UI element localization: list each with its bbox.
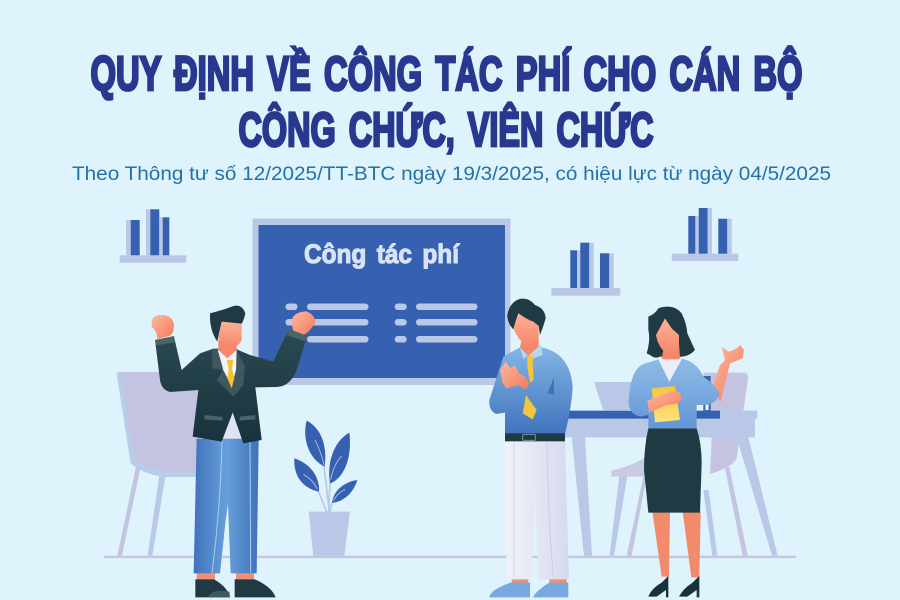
- desk legs: [572, 437, 592, 556]
- skirt: [644, 428, 702, 513]
- legs: [652, 512, 701, 577]
- title: CÔNG CHỨC, VIÊN CHỨC: [238, 102, 654, 157]
- heels: [648, 576, 699, 597]
- shirt: [489, 347, 573, 434]
- chair legs: [610, 467, 748, 556]
- ankles: [512, 579, 567, 583]
- plant in pot: [294, 421, 357, 556]
- fists: [152, 315, 174, 339]
- undershirt: [222, 417, 242, 439]
- face: [513, 314, 539, 347]
- belt: [505, 433, 565, 441]
- shoes: [195, 579, 276, 597]
- subtitle: Theo Thông tư số 12/2025/TT-BTC ngày 19/3/2025, có hiệu lực từ ngày 04/5/2025: [72, 164, 831, 185]
- hair: [210, 306, 245, 342]
- man in dark jacket: [152, 306, 315, 597]
- collar: [520, 344, 543, 359]
- left shelf with books: [120, 209, 186, 263]
- undershirt: [659, 359, 682, 382]
- left chair: [117, 372, 200, 556]
- desk with laptop and right chair: [564, 373, 778, 556]
- shoes: [489, 583, 568, 597]
- board list lines: [286, 304, 478, 342]
- neck: [662, 343, 680, 363]
- jacket: [155, 330, 307, 443]
- shirt: [217, 350, 237, 387]
- board heading: Công tác phí: [304, 239, 460, 269]
- tie: [523, 356, 537, 419]
- raised arm: [712, 345, 744, 402]
- sleeve fold: [547, 377, 554, 395]
- laptop: [594, 382, 637, 411]
- trousers: [505, 441, 569, 579]
- forearm: [647, 391, 682, 413]
- blouse: [629, 359, 720, 428]
- floor line: [104, 556, 796, 558]
- neck: [218, 340, 237, 358]
- neck: [520, 333, 539, 356]
- lapels: [212, 348, 233, 397]
- board: [252, 218, 510, 385]
- legs: [197, 573, 254, 581]
- man clapping: [489, 299, 573, 597]
- right shelf with books: [672, 208, 738, 261]
- chair seat and back: [611, 457, 647, 477]
- tie: [227, 360, 234, 388]
- face: [218, 322, 242, 348]
- clapping hands: [500, 362, 529, 389]
- cuffs: [155, 329, 307, 345]
- centre shelf with books: [551, 243, 620, 296]
- face: [656, 318, 679, 355]
- desk top: [564, 419, 755, 437]
- hair: [647, 307, 695, 358]
- woman with notebook: [629, 307, 744, 597]
- title: [90, 46, 802, 157]
- hair: [507, 299, 546, 335]
- notebook: [652, 386, 680, 422]
